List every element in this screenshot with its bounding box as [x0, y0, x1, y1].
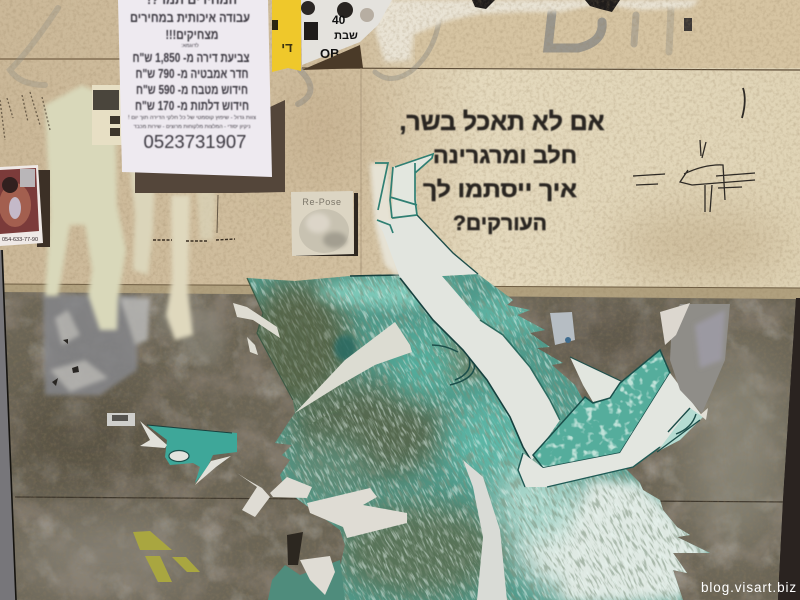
flyer heading: עבודה איכותית במחירים	[130, 10, 250, 25]
outstretched arm	[518, 373, 703, 487]
flyer small print	[128, 42, 256, 130]
lower concrete wall	[0, 284, 800, 600]
black and white collage poster: 40	[332, 13, 346, 27]
small blue paper scrap	[550, 312, 575, 345]
white tail stripe	[463, 460, 507, 600]
flyer heading	[130, 0, 250, 42]
faded pasted paper patch	[43, 294, 225, 395]
pale patch behind shoe	[370, 163, 400, 278]
bird olive body shading	[246, 280, 505, 598]
Re-Pose plaster tile	[291, 191, 358, 256]
Re-Pose plaster tile: Re-Pose	[302, 197, 342, 207]
flyer price list: חידוש דלתות מ- 170 ש"ח	[135, 98, 249, 113]
flyer price list: חידוש מטבח מ- 590 ש"ח	[136, 82, 248, 97]
black and white collage poster	[301, 0, 392, 70]
stencil slogan: העורקים?	[453, 212, 547, 235]
raised leg	[377, 215, 560, 460]
strappy high heel shoe	[375, 154, 433, 233]
flyer small print: ניקיון יסודי - המלצות מלקוחות מרוצים - שירות מכבד	[134, 123, 250, 130]
white price flyer	[118, 0, 272, 177]
teal bird illustration	[246, 274, 710, 600]
yellow poster: די	[281, 40, 293, 55]
stencil slogan: חלב ומרגרינה	[433, 143, 577, 168]
stencil slogan: אם לא תאכל בשר,	[400, 108, 604, 136]
flyer price list: צביעת דירה מ- 1,850 ש"ח	[132, 50, 250, 65]
dark gap at right edge	[778, 298, 800, 600]
poster drop shadow	[135, 100, 285, 193]
bird fur texture	[230, 260, 720, 600]
dark stains near torn paper	[287, 532, 303, 565]
flyer price list: חדר אמבטיה מ- 790 ש"ח	[136, 66, 248, 81]
bird white tail fade	[495, 460, 710, 600]
watermark: blog.visart.biz	[701, 580, 797, 595]
flyer price list	[132, 50, 250, 113]
second arm	[570, 357, 623, 402]
black and white collage poster: שבת	[334, 30, 358, 42]
small scrap of black text paper	[92, 85, 122, 145]
hand drawn sketch graffiti	[633, 88, 755, 212]
bird head olive glaze	[255, 290, 335, 400]
torn paper pieces left of bird	[237, 473, 407, 538]
teal pistol	[140, 421, 237, 485]
bird closed eye lines	[432, 345, 474, 385]
bird teal highlights	[315, 279, 550, 482]
bird eye patch	[334, 335, 356, 361]
black and white collage poster: ОВ	[320, 46, 340, 61]
barcode sticker	[107, 413, 135, 426]
torn white paper strip at top	[375, 0, 700, 62]
upper plaster wall	[0, 0, 800, 300]
torn paper on bird head	[295, 322, 412, 413]
torn paper near beak	[233, 303, 280, 355]
woman figure with legs and dress	[370, 154, 703, 487]
flyer heading: מצחיקים!!!	[166, 27, 218, 42]
flyer small print: לדוגמא:	[181, 42, 199, 49]
stencil slogan	[400, 108, 604, 235]
lower left fur fragment	[268, 556, 345, 600]
small photo flyer on left: 054-633-77-90	[2, 237, 38, 243]
stencil slogan: איך ייסתמו לך	[423, 177, 577, 202]
hair	[657, 408, 703, 452]
bird base colour	[248, 274, 710, 600]
pen marks on wall	[0, 92, 235, 241]
torn grey paper over figure	[660, 303, 730, 420]
grey graffiti traces on top wall	[10, 8, 671, 104]
small photo flyer on left	[0, 165, 50, 247]
dress	[532, 348, 671, 468]
left metal edge	[0, 250, 16, 600]
yellow paint marks	[133, 531, 200, 582]
flyer phone number: 0523731907	[144, 131, 246, 152]
yellow poster	[272, 0, 301, 72]
flyer small print: צוות גדול - שיפוץ קוסמטי של כל חלקי הדירה תוך יום !	[128, 114, 256, 121]
pale paint drips	[45, 85, 216, 340]
